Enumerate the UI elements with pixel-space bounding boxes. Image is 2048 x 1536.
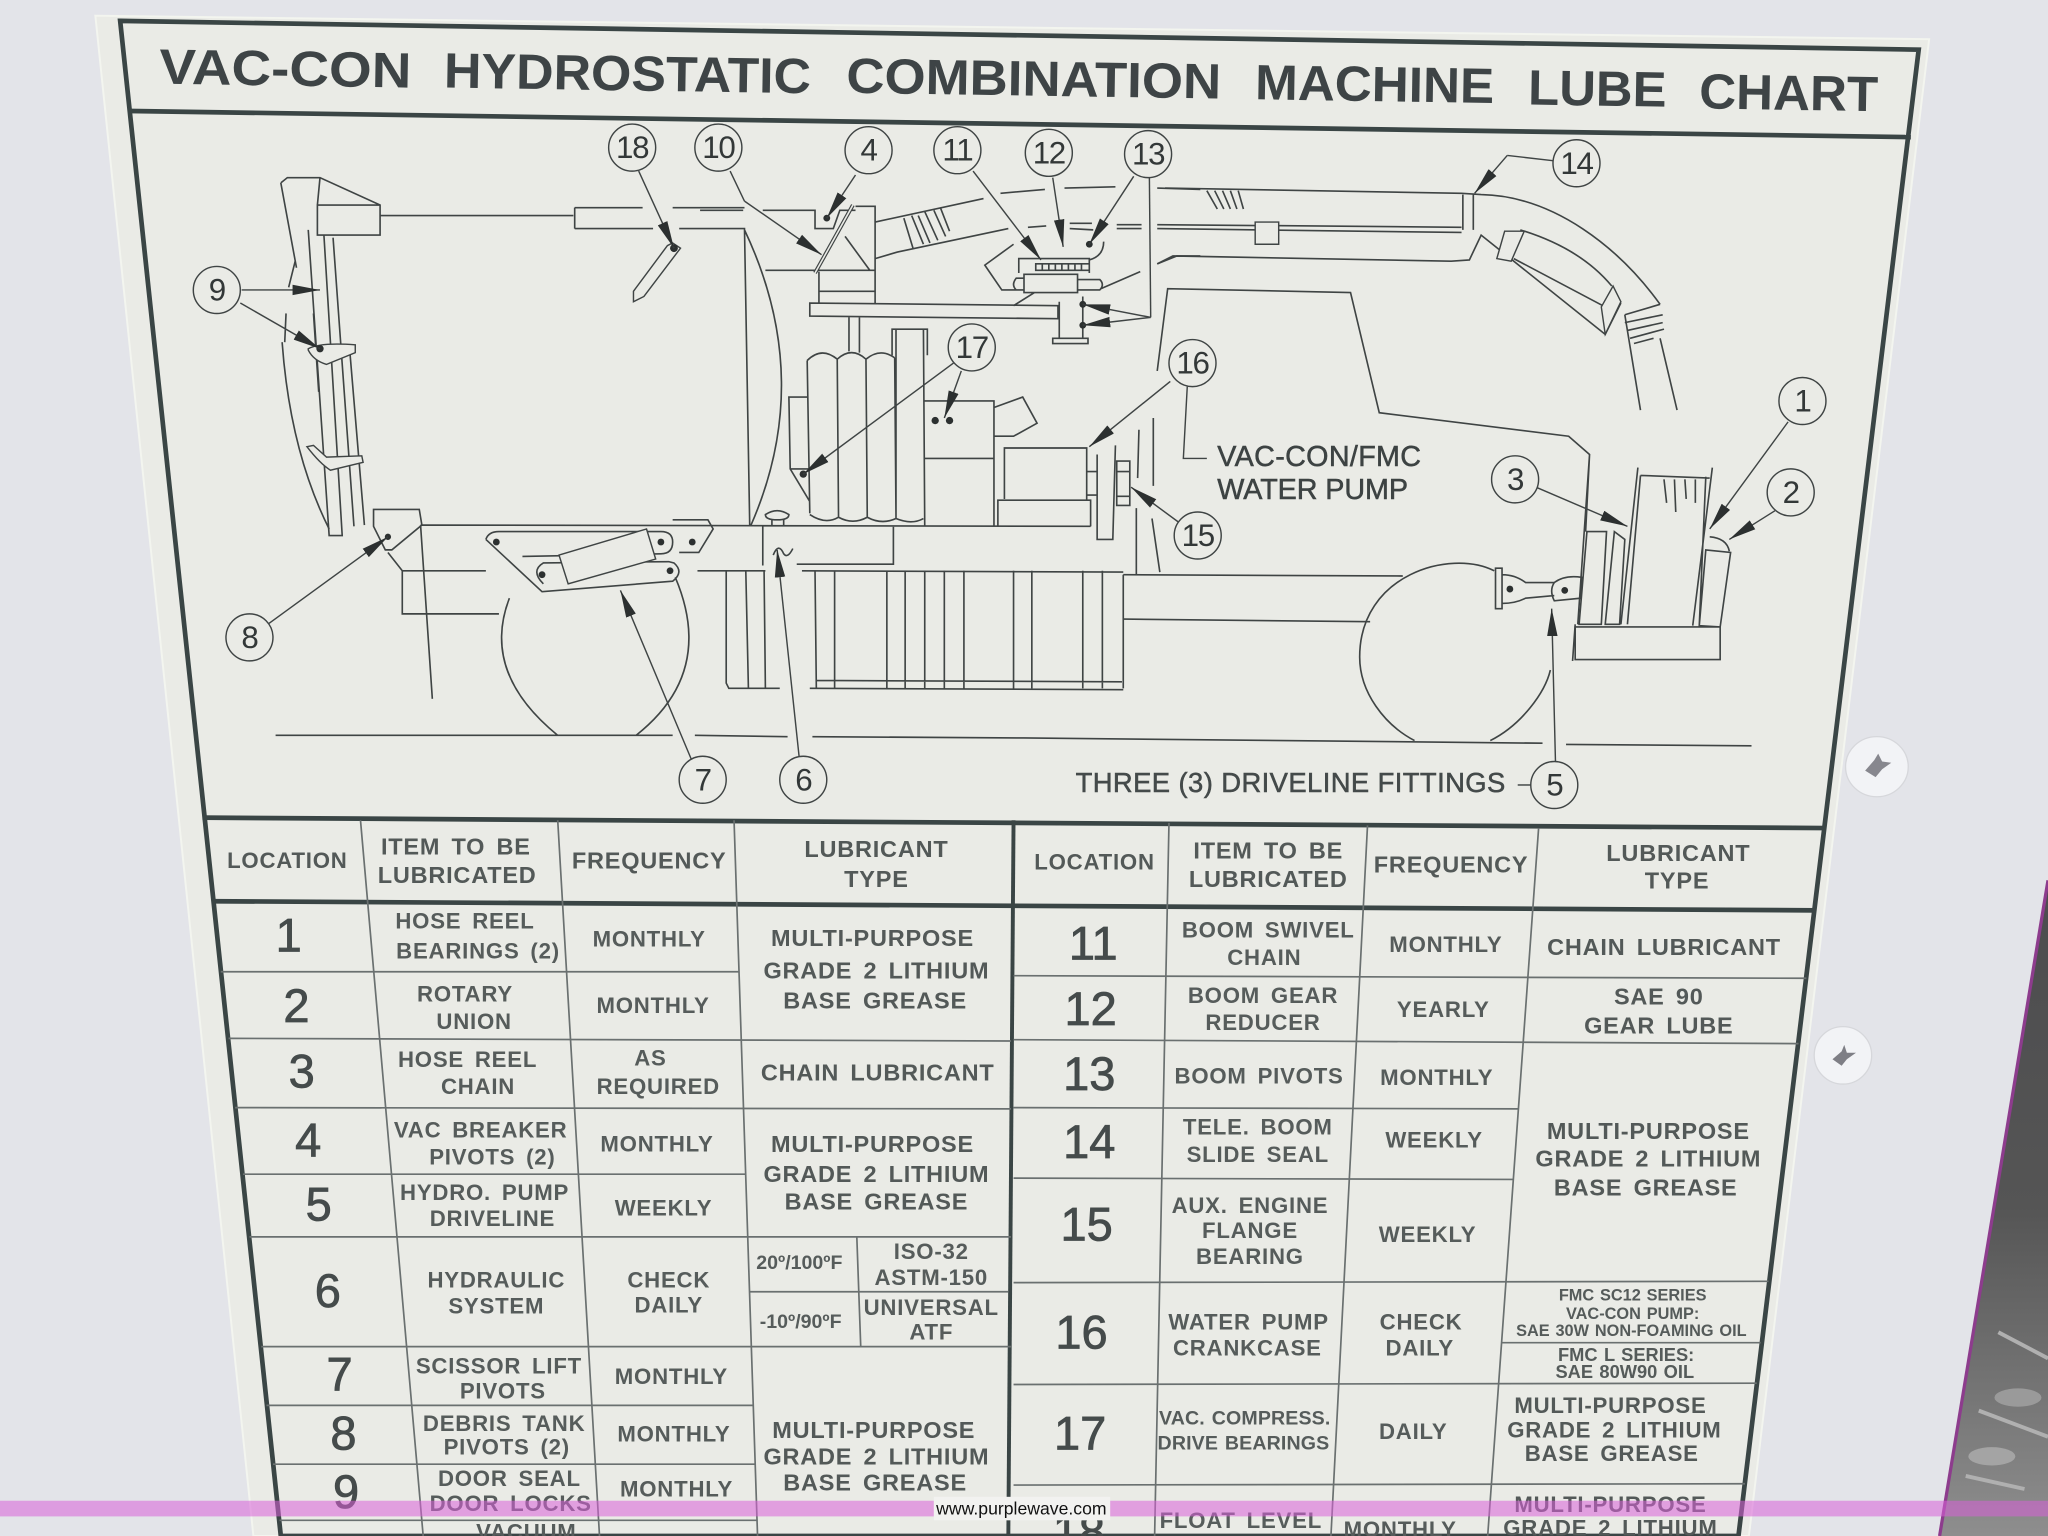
rear wheel (502, 577, 689, 735)
left table row 9: 9 (333, 1465, 359, 1518)
left table row 1: 1 (276, 909, 302, 962)
right table row 13: MONTHLY (1380, 1065, 1493, 1090)
right table row 13: 13 (1063, 1047, 1115, 1100)
right table row 14: 14 (1063, 1115, 1115, 1168)
title: MACHINE (1255, 54, 1495, 114)
right table row 13 (1063, 1047, 1493, 1100)
right table row 16: CRANKCASE (1173, 1335, 1322, 1360)
right table row 15 (1061, 1193, 1476, 1269)
watermark band: www.purplewave.com (935, 1499, 1107, 1519)
right table row 14 (1063, 1115, 1483, 1168)
callout 15: 15 (1182, 518, 1215, 553)
title: HYDROSTATIC (444, 43, 811, 104)
callout 4 (823, 127, 892, 222)
watermark band (0, 1497, 2048, 1520)
boom and hose (1157, 188, 1677, 410)
right table row 12 (1064, 982, 1733, 1038)
title (159, 39, 1879, 122)
left table grease cell rows 4-5: BASE GREASE (785, 1189, 968, 1215)
left table row 6 (315, 1239, 999, 1345)
left table row 4 (295, 1114, 714, 1170)
right table row 16 (1055, 1287, 1747, 1382)
callout 5 with driveline fittings label: THREE (3) DRIVELINE FITTINGS (1076, 767, 1505, 798)
left table grease cell rows 4-5 (763, 1131, 989, 1215)
left table grease cell rows 4-5: MULTI-PURPOSE (771, 1131, 974, 1157)
left table row 4: MONTHLY (600, 1132, 714, 1157)
left table row 2: UNION (436, 1009, 512, 1034)
right table row 17: MULTI-PURPOSE (1514, 1393, 1707, 1418)
left table row 6: 6 (315, 1264, 341, 1317)
right table row 16: WATER PUMP (1168, 1309, 1329, 1334)
right table row 16: FMC SC12 SERIES (1559, 1287, 1707, 1305)
left table header: LUBRICATED (378, 862, 537, 888)
right table header: LOCATION (1034, 850, 1155, 875)
left table grease cell rows 1-2 (763, 925, 989, 1013)
callout 11 (934, 127, 1041, 260)
left table row 1: MONTHLY (593, 927, 706, 952)
right table row 16: SAE 30W NON-FOAMING OIL (1516, 1322, 1747, 1340)
callout 16 with water pump label: VAC-CON/FMC (1217, 441, 1421, 473)
left table row 8: MONTHLY (617, 1422, 731, 1447)
left table row 6: UNIVERSAL (864, 1295, 999, 1320)
right table row 12: BOOM GEAR (1188, 983, 1338, 1008)
left table row 6: ASTM-150 (874, 1265, 988, 1290)
right table row 14: WEEKLY (1385, 1128, 1483, 1153)
callout 7 (620, 590, 726, 803)
title: CHART (1699, 63, 1879, 122)
left table row 3: REQUIRED (597, 1074, 720, 1099)
right table row 12: REDUCER (1205, 1010, 1321, 1035)
callout 9 (193, 266, 324, 352)
right table row 17: VAC. COMPRESS. (1159, 1407, 1330, 1429)
left table row 7: 7 (327, 1348, 353, 1401)
left table row 8: 8 (330, 1406, 357, 1459)
right table grease cell rows 13-15 (1535, 1118, 1761, 1200)
left table row 6: SYSTEM (448, 1294, 544, 1319)
left table row 6: -10º/90ºF (760, 1311, 842, 1333)
right table row 15: BEARING (1196, 1244, 1304, 1269)
callout 15 (1131, 487, 1221, 559)
callout 6 (777, 550, 827, 803)
front wheel and driveline (1360, 563, 1550, 741)
right table row 11: 11 (1069, 917, 1118, 970)
left table row 5: WEEKLY (615, 1196, 712, 1221)
left table row 1 (276, 908, 706, 963)
left table row 1: HOSE REEL (395, 908, 535, 933)
diamond plate at lower right (1940, 880, 2048, 1536)
callout 17: 17 (956, 330, 988, 365)
callout 7: 7 (695, 762, 711, 797)
right table row 17: GRADE 2 LITHIUM (1507, 1418, 1722, 1443)
left table row 6: 20º/100ºF (756, 1252, 842, 1274)
callout 1 (1710, 377, 1826, 529)
callout 6: 6 (795, 762, 812, 797)
right table row 11: MONTHLY (1389, 932, 1502, 957)
callout 17 (800, 324, 995, 478)
left table row 5 (306, 1178, 712, 1231)
left table row 9 (333, 1465, 733, 1518)
right table row 17: BASE GREASE (1525, 1441, 1699, 1466)
left table grease cell rows 1-2: BASE GREASE (783, 987, 967, 1013)
right table row 16: CHECK (1380, 1309, 1462, 1334)
callout 16 with water pump label (1089, 340, 1421, 506)
right table row 14: SLIDE SEAL (1187, 1142, 1329, 1167)
debris tank door (281, 178, 380, 536)
callout 10: 10 (702, 130, 735, 165)
left table row 5: DRIVELINE (430, 1206, 555, 1231)
left table row 3: 3 (289, 1045, 315, 1098)
right table row 11 (1069, 917, 1781, 970)
left table row 9: DOOR LOCKS (430, 1491, 592, 1516)
right table row 17 (1054, 1393, 1722, 1466)
callout 5 with driveline fittings label: 5 (1546, 767, 1563, 802)
left table row 2: MONTHLY (596, 993, 710, 1018)
left table header: LOCATION (227, 848, 348, 873)
right table header: LUBRICANT (1606, 840, 1750, 866)
left table row 2: 2 (283, 979, 310, 1032)
right table row 15: AUX. ENGINE (1172, 1193, 1328, 1218)
left table row 1: BEARINGS (2) (396, 938, 560, 963)
left table row 7: MONTHLY (615, 1364, 728, 1389)
right table row 17: DRIVE BEARINGS (1158, 1432, 1329, 1454)
frame uprights (726, 571, 1123, 690)
title: LUBE (1528, 60, 1667, 118)
left table row 6: ATF (909, 1320, 953, 1345)
right table header (1034, 837, 1750, 893)
title: COMBINATION (846, 48, 1222, 110)
right table row 14: TELE. BOOM (1183, 1115, 1333, 1140)
callout 8: 8 (241, 620, 258, 655)
left table row 2: ROTARY (417, 981, 513, 1006)
left table row 3: AS (634, 1045, 667, 1070)
right table grease cell rows 13-15: GRADE 2 LITHIUM (1535, 1146, 1761, 1172)
callout 3 (1492, 456, 1627, 526)
left table row 4: VAC BREAKER (394, 1117, 567, 1142)
left table row 6: CHECK (627, 1268, 710, 1292)
left table row 6: DAILY (635, 1292, 703, 1317)
water pump block (998, 418, 1160, 575)
boom pivot and gearbox (985, 242, 1200, 344)
callout 16 with water pump label: WATER PUMP (1217, 474, 1408, 506)
left table row 5: 5 (306, 1178, 332, 1231)
right table grease cell rows 13-15: MULTI-PURPOSE (1547, 1118, 1750, 1144)
left table row 4: PIVOTS (2) (429, 1145, 556, 1170)
left table header (227, 833, 948, 892)
left table grease cell rows 7-10 (763, 1417, 989, 1495)
mounting screw upper (1846, 737, 1908, 797)
vacuum breaker and platform (700, 206, 1058, 353)
left table grease cell rows 7-10: MULTI-PURPOSE (772, 1417, 975, 1443)
callout 9: 9 (209, 272, 225, 307)
right table grease cell rows 13-15: BASE GREASE (1554, 1174, 1738, 1200)
left table header: FREQUENCY (572, 848, 726, 874)
right table row 15: FLANGE (1202, 1218, 1298, 1243)
callout 13 (1079, 131, 1172, 329)
callout 2: 2 (1783, 475, 1799, 510)
left table row 4: 4 (295, 1114, 321, 1167)
ground line (276, 735, 1752, 746)
right table header: TYPE (1645, 867, 1709, 893)
right table row 11: CHAIN LUBRICANT (1547, 934, 1781, 960)
left table row 3: CHAIN LUBRICANT (761, 1059, 995, 1085)
left table row 3 (289, 1045, 995, 1099)
right table header: ITEM TO BE (1193, 837, 1343, 863)
blower and compressor stack (789, 329, 1037, 526)
left table header: TYPE (844, 866, 909, 892)
left table grease cell rows 4-5: GRADE 2 LITHIUM (763, 1161, 989, 1187)
callout 12: 12 (1033, 135, 1065, 170)
left table row 3: HOSE REEL (398, 1047, 537, 1072)
callout 18 (609, 124, 680, 302)
right table row 12: GEAR LUBE (1584, 1012, 1733, 1038)
left table row 9: MONTHLY (620, 1476, 733, 1501)
callout 14: 14 (1560, 146, 1593, 181)
left table header: ITEM TO BE (381, 833, 531, 859)
frame, chassis and rails (374, 509, 1403, 699)
left table header: LUBRICANT (804, 836, 948, 862)
right table row 12: SAE 90 (1614, 984, 1704, 1010)
right table row 15: WEEKLY (1379, 1222, 1476, 1247)
left table grease cell rows 1-2: GRADE 2 LITHIUM (763, 957, 989, 983)
right table row 16: FMC L SERIES: (1558, 1344, 1694, 1365)
left table row 7: PIVOTS (460, 1379, 546, 1404)
callout 2 (1729, 469, 1814, 539)
left table row 8: DEBRIS TANK (423, 1411, 585, 1436)
right table row 16: VAC-CON PUMP: (1566, 1305, 1699, 1323)
right table row 12: YEARLY (1397, 997, 1490, 1022)
left table row 8: PIVOTS (2) (444, 1435, 570, 1460)
right table row 11: CHAIN (1227, 945, 1301, 970)
title: VAC-CON (159, 39, 412, 99)
scissor lift (486, 520, 713, 592)
callout 16 with water pump label: 16 (1176, 346, 1209, 381)
tank body and top lines (380, 208, 781, 525)
left table row 6: HYDRAULIC (427, 1268, 565, 1292)
left table row 9: DOOR SEAL (438, 1466, 581, 1491)
left table row 3: CHAIN (441, 1074, 515, 1099)
callout 3: 3 (1507, 462, 1524, 497)
right table row 11: BOOM SWIVEL (1182, 917, 1355, 942)
callout 13: 13 (1132, 137, 1165, 172)
callout 10 (695, 124, 822, 255)
callout 12 (1025, 129, 1072, 247)
table grid lines (202, 818, 1826, 1536)
right table header: FREQUENCY (1374, 852, 1528, 878)
right table row 17: DAILY (1379, 1419, 1447, 1444)
right table row 13: BOOM PIVOTS (1175, 1064, 1344, 1089)
right table row 18 partial: MULTI-PURPOSE (1514, 1492, 1707, 1517)
left table grease cell rows 7-10: GRADE 2 LITHIUM (763, 1443, 989, 1469)
left table grease cell rows 1-2: MULTI-PURPOSE (771, 925, 974, 951)
right table row 16: DAILY (1386, 1335, 1454, 1360)
right table row 15: 15 (1061, 1197, 1113, 1250)
machine line diagram (276, 178, 1752, 746)
callout 5 with driveline fittings label (1076, 609, 1578, 808)
right table row 17: 17 (1054, 1406, 1106, 1459)
callout 1: 1 (1794, 383, 1811, 418)
callout 4: 4 (861, 133, 878, 168)
right table row 18 partial: FLOAT LEVEL (1160, 1508, 1322, 1533)
hose reel (1575, 468, 1731, 660)
callout 14 (1475, 140, 1600, 193)
left table row 6: ISO-32 (894, 1239, 969, 1264)
callout 11: 11 (942, 133, 972, 168)
cab outline (1157, 289, 1590, 661)
right table row 16: SAE 80W90 OIL (1555, 1361, 1694, 1382)
left table row 8 (330, 1406, 731, 1460)
mounting screw lower (1814, 1027, 1872, 1084)
callout 8 (226, 534, 391, 661)
left table grease cell rows 7-10: BASE GREASE (783, 1469, 967, 1495)
left table row 7: SCISSOR LIFT (416, 1354, 582, 1379)
left table row 2 (283, 979, 710, 1034)
hydraulic tank filler (765, 511, 793, 556)
callout 18: 18 (616, 130, 649, 165)
left table row 7 (327, 1348, 728, 1404)
right table row 18 partial (1053, 1492, 1718, 1536)
right table row 12: 12 (1064, 982, 1117, 1035)
left table row 5: HYDRO. PUMP (400, 1180, 569, 1205)
right table row 16: 16 (1055, 1306, 1108, 1359)
right table header: LUBRICATED (1189, 866, 1348, 892)
